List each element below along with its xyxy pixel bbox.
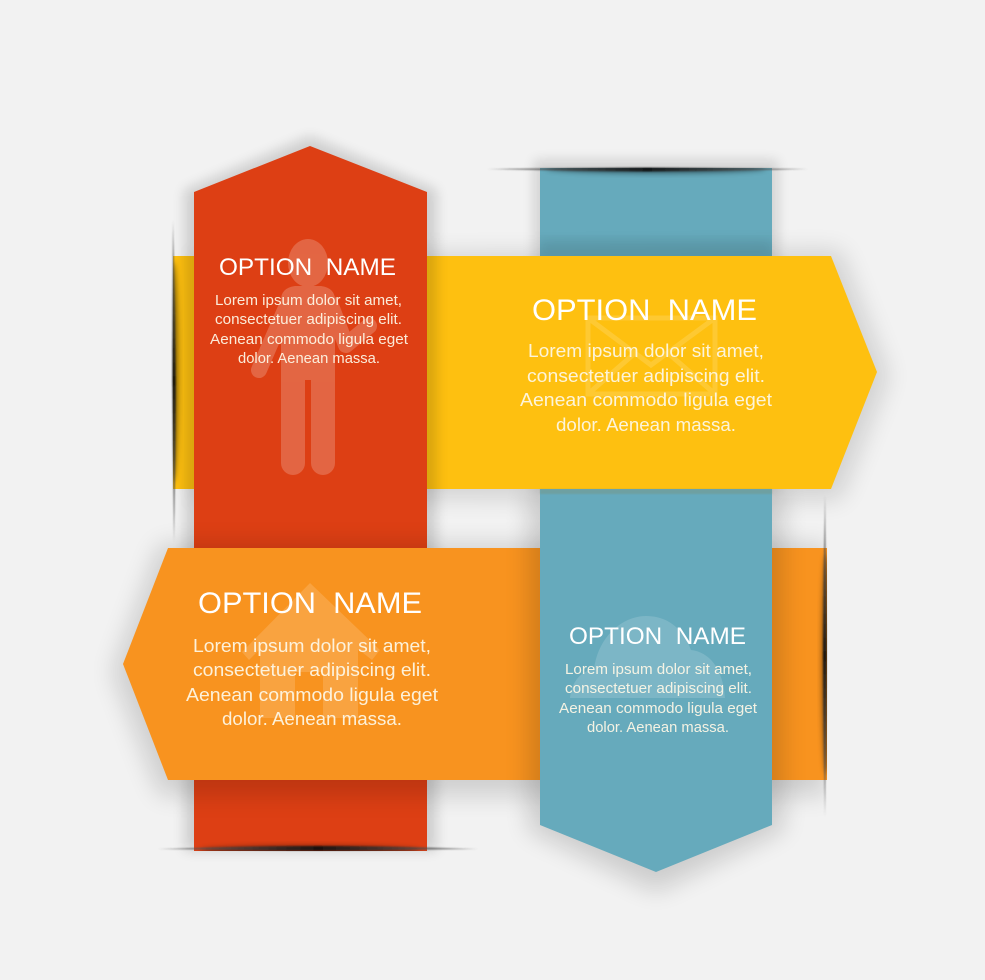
text block: blue option: dolor. Aenean massa. xyxy=(587,720,729,736)
text block: blue option: consectetuer adipiscing elit. xyxy=(565,681,752,697)
heading: orange option: OPTION NAME xyxy=(198,587,422,620)
panel: yellow option text xyxy=(520,294,772,435)
text block: red option: dolor. Aenean massa. xyxy=(238,351,380,367)
heading: yellow option: OPTION NAME xyxy=(532,294,757,327)
panel: red option text xyxy=(210,254,408,367)
text block: blue option: Lorem ipsum dolor sit amet, xyxy=(565,662,752,678)
ribbon: blue upper section xyxy=(534,160,778,489)
heading: blue option: OPTION NAME xyxy=(569,623,746,650)
text block: blue option xyxy=(559,662,757,736)
slit: top, blue ribbon xyxy=(487,168,808,172)
ribbon: red with upward arrow xyxy=(184,136,437,856)
icon: cloud xyxy=(570,616,725,698)
icon: house xyxy=(242,583,380,718)
slit: right, orange band xyxy=(823,495,826,817)
text block: orange option: dolor. Aenean massa. xyxy=(222,709,402,729)
icon: person xyxy=(259,239,369,475)
text block: yellow option: dolor. Aenean massa. xyxy=(556,415,736,435)
panel: blue option text xyxy=(559,623,757,736)
text block: orange option xyxy=(186,636,438,729)
slit: bottom, red ribbon xyxy=(158,846,478,850)
ribbon: blue lower section with down arrow xyxy=(540,489,772,872)
text block: orange option: Aenean commodo ligula eget xyxy=(186,685,438,705)
heading: red option: OPTION NAME xyxy=(219,254,396,281)
text block: blue option: Aenean commodo ligula eget xyxy=(559,701,757,717)
icon: envelope xyxy=(588,318,715,394)
ribbon: orange band with left arrow xyxy=(112,544,832,796)
text block: orange option: consectetuer adipiscing elit. xyxy=(193,660,431,680)
text block: yellow option: Lorem ipsum dolor sit amet, xyxy=(528,341,764,361)
text block: red option: consectetuer adipiscing elit. xyxy=(215,312,402,328)
panel: orange option text xyxy=(186,587,438,729)
slit: left, yellow band xyxy=(172,220,176,542)
ribbon: yellow band with arrow xyxy=(168,250,889,500)
shadow: under blue lower section xyxy=(528,489,784,892)
shadow: yellow cast on blue xyxy=(540,489,772,494)
text block: yellow option xyxy=(520,341,772,435)
text block: yellow option: Aenean commodo ligula eget xyxy=(520,390,772,410)
text block: orange option: Lorem ipsum dolor sit amet, xyxy=(193,636,431,656)
text block: red option: Lorem ipsum dolor sit amet, xyxy=(215,293,402,309)
text block: yellow option: consectetuer adipiscing elit. xyxy=(527,366,765,386)
text block: red option xyxy=(210,293,408,367)
text block: red option: Aenean commodo ligula eget xyxy=(210,332,408,348)
